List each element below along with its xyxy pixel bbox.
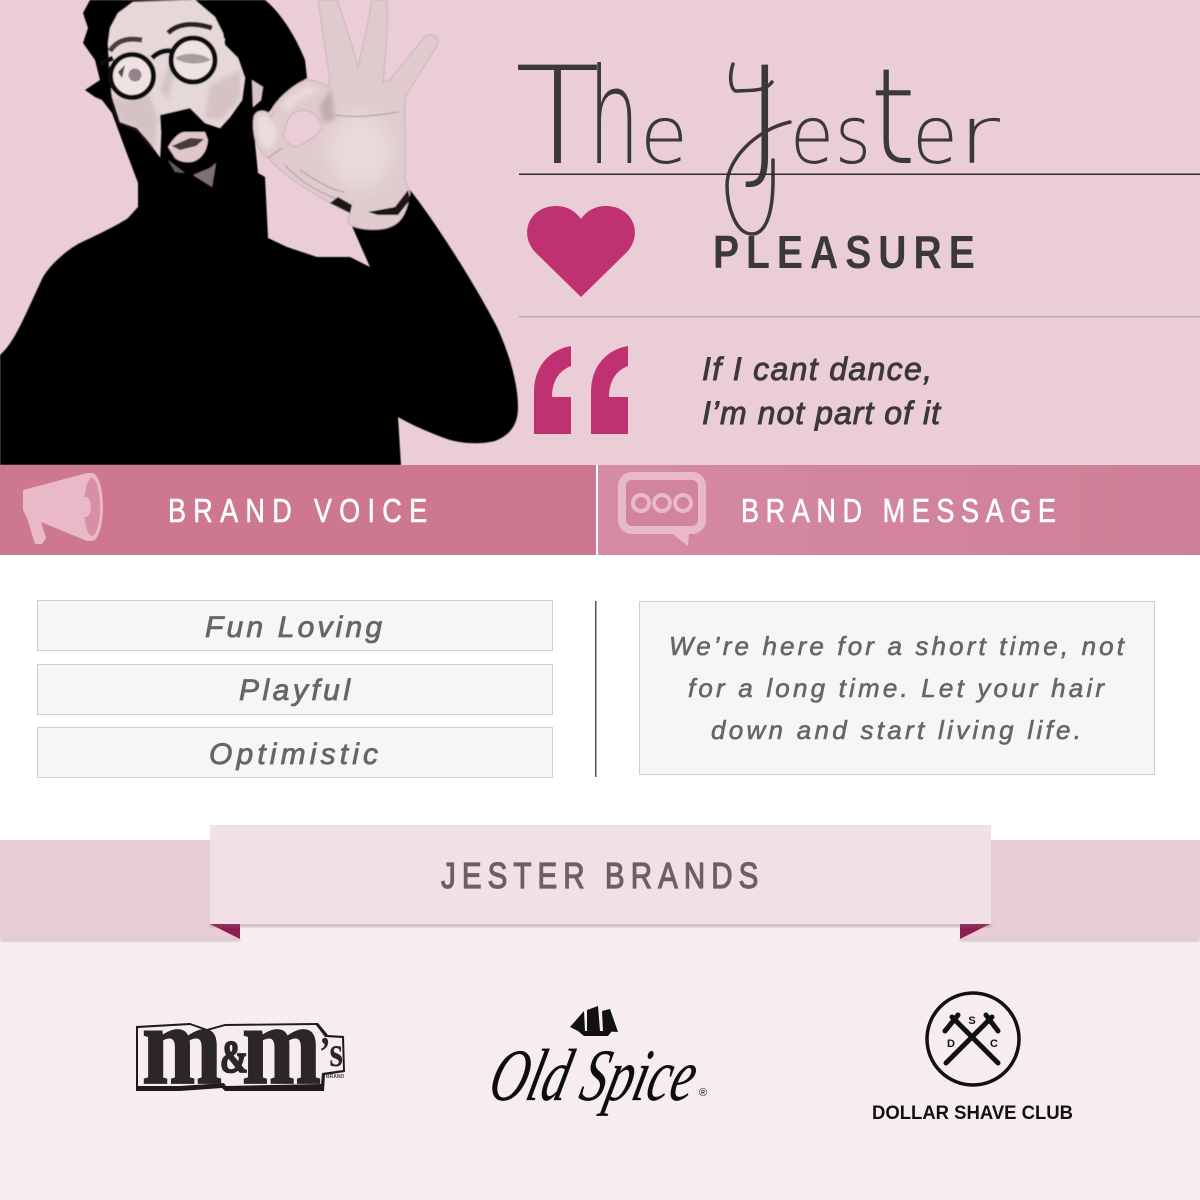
title text: s (835, 89, 871, 182)
panel: brand message bar (598, 465, 1200, 555)
quote text: If I cant dance, (702, 351, 932, 387)
bar background (598, 465, 1200, 555)
photo: man with glasses making OK gesture (0, 0, 518, 465)
message box (640, 602, 1154, 774)
box: playful (38, 664, 552, 714)
logo word: m (142, 984, 222, 1108)
bar background (0, 465, 596, 555)
mouth (168, 132, 208, 162)
message text: down and start living life. (711, 715, 1081, 745)
body and sleeve silhouette (0, 0, 518, 465)
icon: megaphone (23, 473, 103, 544)
divider under pleasure (519, 316, 1200, 318)
message text: for a long time. Let your hair (688, 673, 1105, 703)
divider between voice and message (595, 601, 596, 777)
right eyebrow (168, 24, 212, 33)
mouth opening (172, 138, 204, 150)
face shading (112, 62, 240, 150)
hand (253, 0, 438, 230)
ribbon: right tail (960, 840, 1200, 941)
wordmark: Old Spice (482, 1035, 706, 1117)
ribbon fold left (210, 924, 240, 939)
title text: T (515, 38, 600, 195)
label: brand message: BRAND MESSAGE (741, 494, 1056, 530)
message text: We’re here for a short time, not (669, 631, 1126, 661)
right lens (171, 38, 215, 82)
title text: h (588, 41, 640, 195)
emblem letters (947, 1015, 998, 1050)
panel: brands background (0, 924, 1200, 1200)
index finger highlight (280, 86, 320, 112)
box: optimistic: Optimistic (209, 738, 378, 771)
logo: m&m's (136, 984, 345, 1108)
chin patch (193, 163, 216, 187)
heading: PLEASURE: PLEASURE (713, 227, 975, 279)
panel: brand voice list (38, 600, 552, 778)
left eye lashes (118, 65, 125, 78)
ribbon fold right (960, 924, 990, 939)
ribbon: centre panel (210, 825, 991, 926)
bridge and left arm (100, 51, 172, 64)
logo: old spice (482, 1006, 707, 1117)
icon: quotation marks (534, 346, 628, 434)
panel: brand voice bar (0, 465, 596, 555)
ear (252, 80, 263, 107)
logo white inset (138, 1025, 343, 1086)
thumb highlight (257, 114, 277, 150)
title text: e (912, 89, 958, 182)
logo brand tag: BRAND (326, 1074, 344, 1080)
logo apostrophe s: ’s (319, 1030, 343, 1076)
box: optimistic (38, 728, 552, 778)
logo: dollar shave club (872, 993, 1073, 1124)
divider under title (519, 174, 1200, 175)
crossed hammers (945, 1015, 998, 1063)
right eye (175, 54, 211, 64)
ship icon (570, 1006, 618, 1036)
registered mark: ® (699, 1087, 707, 1099)
title text: t (870, 41, 916, 195)
chin patch left (168, 160, 185, 173)
logo shadow outline (136, 1023, 345, 1091)
left eyebrow (110, 39, 142, 51)
panel: header background (0, 0, 1200, 465)
glasses (100, 38, 224, 98)
left lens (110, 54, 154, 98)
cuff shadow (330, 190, 410, 215)
J swash (727, 64, 790, 234)
title text: e (640, 89, 688, 182)
heading: jester brands: JESTER BRANDS (441, 855, 758, 896)
panel: brand message text (640, 602, 1154, 774)
emblem circle (927, 993, 1019, 1085)
crease shadow (319, 88, 335, 123)
box: fun loving (38, 600, 552, 650)
box: playful: Playful (239, 674, 351, 707)
emblem letters: D (947, 1038, 955, 1050)
emblem letters: C (990, 1038, 998, 1050)
title text: e (790, 89, 834, 182)
title text: r (958, 89, 1000, 182)
title: The Jester (515, 38, 1000, 234)
icon: speech bubble (622, 476, 702, 546)
emblem letters: S (968, 1015, 976, 1027)
quote text: I’m not part of it (702, 395, 941, 431)
logo word: m (242, 984, 321, 1108)
face (108, 0, 245, 157)
logo word: & (220, 1031, 248, 1082)
title text: J (745, 38, 785, 195)
icon: heart (527, 206, 635, 297)
hand creases (268, 112, 398, 203)
ribbon: left tail (0, 840, 240, 941)
palm highlight (328, 112, 392, 188)
logo text: DOLLAR SHAVE CLUB (872, 1103, 1073, 1124)
label: brand voice: BRAND VOICE (168, 494, 427, 530)
left eye (128, 68, 142, 82)
right arm (214, 38, 224, 44)
box: fun loving: Fun Loving (205, 611, 382, 644)
